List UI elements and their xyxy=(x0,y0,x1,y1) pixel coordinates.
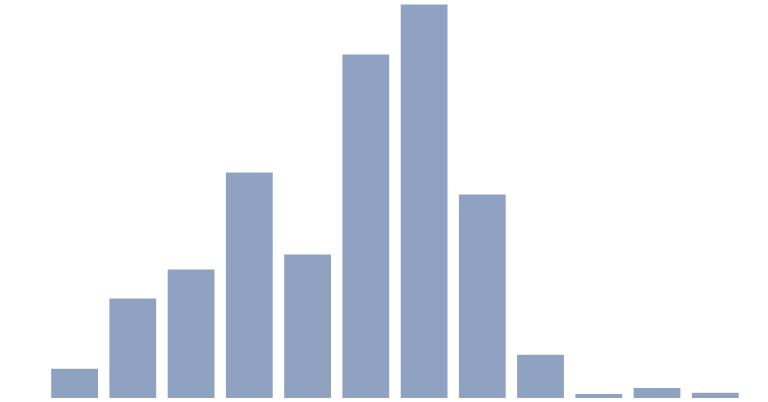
bar 8 xyxy=(459,194,506,398)
bar 9 xyxy=(517,355,564,398)
bar 2 xyxy=(109,298,156,398)
bar 4 xyxy=(226,172,273,398)
bar 1 xyxy=(51,369,98,398)
bar 7 xyxy=(401,4,448,398)
bar 10 xyxy=(575,394,622,398)
bar 5 xyxy=(284,254,331,398)
bar 11 xyxy=(634,388,680,398)
bar 6 xyxy=(342,54,389,398)
bar 12 xyxy=(692,393,739,398)
bar 3 xyxy=(168,270,214,398)
